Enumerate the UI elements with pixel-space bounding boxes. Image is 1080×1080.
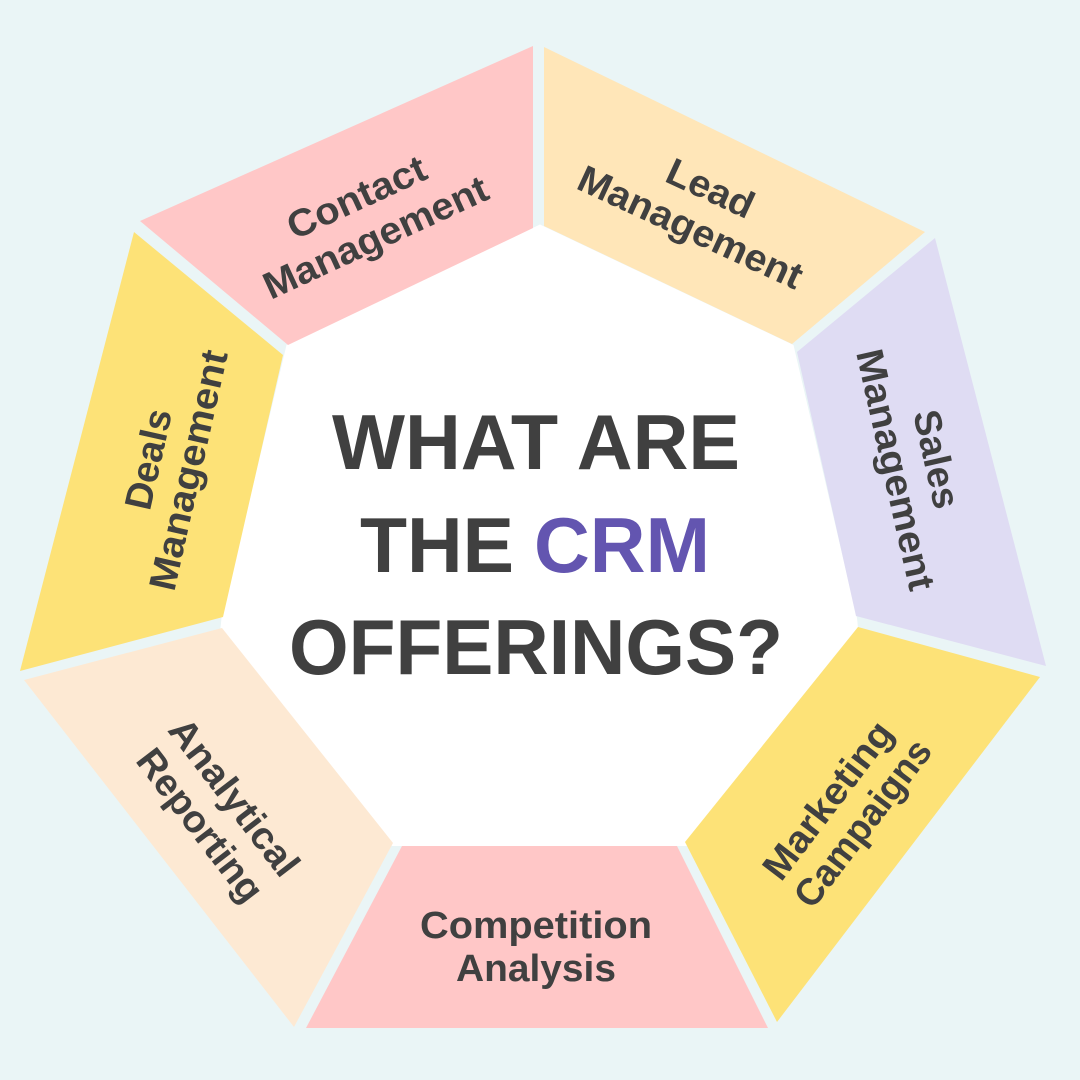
center title: [289, 398, 783, 691]
segment: Analytical Reporting: Reporting: [127, 741, 272, 911]
segment: Sales Management: [797, 238, 1046, 666]
center title: THE: [360, 501, 514, 589]
segment: Deals Management: [20, 232, 283, 671]
segment: Deals Management: Deals: [118, 405, 181, 514]
segment: Lead Management: Lead: [659, 151, 761, 227]
segment: Contact Management: Contact: [281, 148, 434, 248]
segment: Lead Management: Management: [571, 158, 809, 298]
segment: Analytical Reporting: [24, 628, 393, 1027]
segment: Contact Management: [140, 46, 533, 345]
segment: Contact Management: Management: [257, 168, 495, 308]
center title: WHAT ARE: [332, 398, 740, 486]
segment: Deals Management: Management: [142, 346, 237, 594]
segment: Marketing Campaigns: [685, 627, 1040, 1022]
center title: OFFERINGS?: [289, 603, 783, 691]
center white heptagon: [220, 224, 858, 846]
segment: Sales Management: Management: [847, 345, 942, 595]
center title: CRM: [534, 501, 710, 589]
segment: Marketing Campaigns: Marketing: [755, 713, 902, 888]
segment: Competition Analysis: Analysis: [456, 948, 616, 990]
segment: Analytical Reporting: Analytical: [160, 710, 307, 885]
segment: Competition Analysis: Competition: [420, 905, 652, 947]
segment: Sales Management: Sales: [904, 406, 967, 513]
segment: Marketing Campaigns: Campaigns: [786, 731, 941, 916]
segment: Competition Analysis: [306, 846, 768, 1028]
segment: Lead Management: [544, 47, 925, 344]
